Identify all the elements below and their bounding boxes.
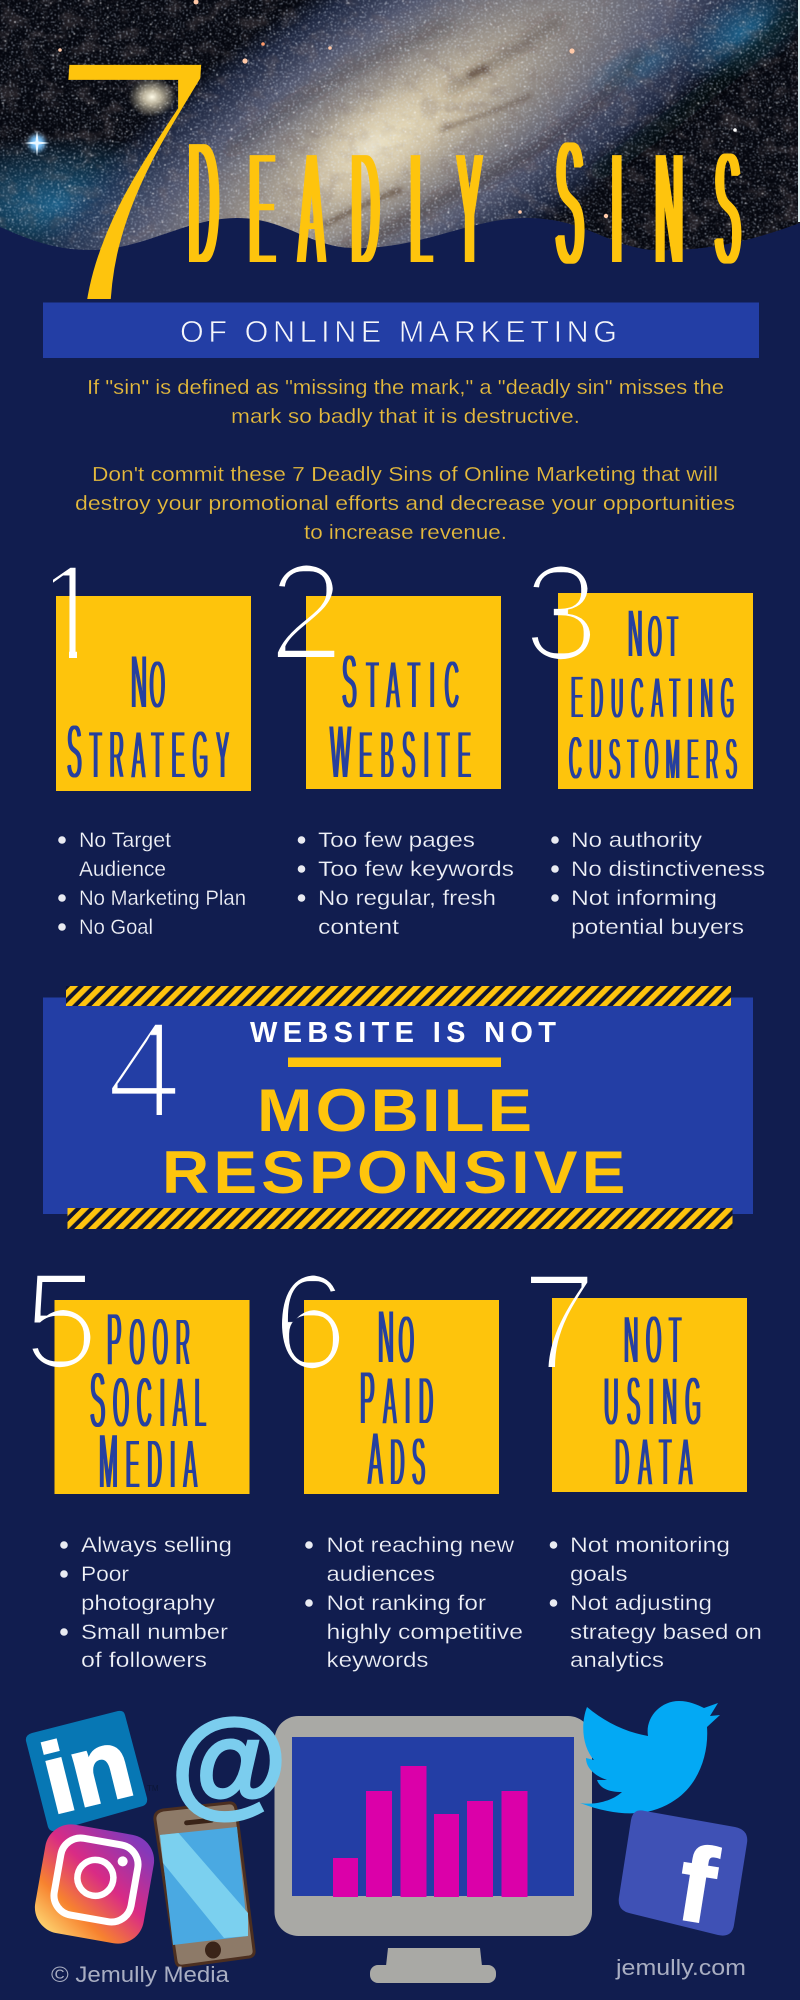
sin 3 bullets: No distinctiveness xyxy=(571,858,765,881)
icon: facebook xyxy=(619,1810,747,1946)
galaxy photo header xyxy=(0,0,800,250)
sin 6 panel: ADS xyxy=(368,1416,425,1501)
website: jemully.com xyxy=(615,1955,746,1980)
sin 5 bullets: of followers xyxy=(81,1649,207,1672)
sin 4 banner xyxy=(43,986,753,1229)
heading: mobile responsive xyxy=(162,1077,625,1206)
icon: instagram xyxy=(31,1820,158,1948)
sin 3 bullets: Not informing xyxy=(571,887,717,910)
sin 7 bullets: analytics xyxy=(570,1649,664,1672)
sin 6 bullets: Not reaching new xyxy=(326,1534,515,1557)
sin 5 panel xyxy=(23,1245,250,1506)
sin 1 bullets: No Goal xyxy=(79,916,153,939)
intro text: mark so badly that it is destructive. xyxy=(231,405,580,428)
number 3: 3 xyxy=(523,537,599,690)
sin 1 panel: NO xyxy=(131,639,165,724)
icon: phone xyxy=(155,1803,254,1966)
sin 2 panel xyxy=(268,536,501,794)
sin 5 bullets: photography xyxy=(81,1592,216,1615)
sin 7 bullets: Not monitoring xyxy=(570,1534,730,1557)
sin 3 panel: CUSTOMERS xyxy=(569,723,737,793)
number 5: 5 xyxy=(23,1245,99,1398)
intro text xyxy=(75,376,735,544)
sin 3 bullets xyxy=(551,829,765,939)
hazard strip top xyxy=(66,986,731,1006)
sin 3 panel: EDUCATING xyxy=(571,662,734,732)
sin 5 bullets: Always selling xyxy=(81,1534,232,1557)
icon: facebook: f xyxy=(670,1824,724,1946)
sin 7 panel: DATA xyxy=(615,1424,692,1500)
sin 6 bullets: audiences xyxy=(326,1563,435,1586)
intro text: destroy your promotional efforts and decrease your opportunities xyxy=(75,492,735,515)
sin 2 bullets: Too few pages xyxy=(318,829,475,852)
number 2: 2 xyxy=(268,536,344,689)
number 7: 7 xyxy=(521,1246,597,1399)
sin 7 bullets: strategy based on xyxy=(570,1621,762,1644)
sin 2 bullets: content xyxy=(318,916,399,939)
sin 3 bullets: potential buyers xyxy=(571,916,744,939)
sin 7 panel xyxy=(521,1246,747,1500)
sin 6 panel xyxy=(272,1246,499,1501)
sin 7 bullets xyxy=(550,1534,762,1672)
sin 7 bullets: Not adjusting xyxy=(570,1592,712,1615)
sin 3 bullets: No authority xyxy=(571,829,703,852)
title: deadly sins: DEADLY SINS xyxy=(189,102,740,304)
icon: monitor with bar chart xyxy=(274,1716,592,1983)
intro text: Don't commit these 7 Deadly Sins of Online Marketing that will xyxy=(92,463,718,486)
sin 1 bullets: Audience xyxy=(79,858,166,881)
heading: mobile responsive: RESPONSIVE xyxy=(162,1139,625,1206)
bar chart xyxy=(333,1766,528,1897)
icon: at sign: @ xyxy=(171,1695,287,1828)
sin 7 panel: USING xyxy=(604,1363,701,1440)
sin 2 bullets: Too few keywords xyxy=(318,858,514,881)
heading: mobile responsive: MOBILE xyxy=(257,1077,532,1144)
intro text: If "sin" is defined as "missing the mark," a "deadly sin" misses the xyxy=(87,376,724,399)
subtitle banner xyxy=(43,302,759,358)
sin 5 bullets: Small number xyxy=(81,1621,228,1644)
sin 5 panel: POOR xyxy=(107,1297,190,1381)
sin 7 bullets: goals xyxy=(570,1563,628,1586)
sin 6 panel: PAID xyxy=(360,1355,433,1440)
divider xyxy=(288,1058,501,1067)
sin 6 bullets: highly competitive xyxy=(326,1621,523,1644)
sin 1 bullets: No Marketing Plan xyxy=(79,887,246,910)
sin 6 bullets: keywords xyxy=(326,1649,428,1672)
number 4: 4 xyxy=(106,994,182,1147)
icon: linkedin: TM xyxy=(147,1784,159,1793)
hazard strip bottom xyxy=(68,1208,732,1229)
subtitle banner: OF ONLINE MARKETING xyxy=(180,315,617,349)
sin 1 bullets: No Target xyxy=(79,829,171,852)
sin 7 panel: NOT xyxy=(624,1302,681,1378)
sin 5 panel: MEDIA xyxy=(99,1419,197,1506)
sin 5 panel: SOCIAL xyxy=(90,1356,206,1445)
sin 5 bullets: Poor xyxy=(81,1563,129,1586)
sin 2 bullets: No regular, fresh xyxy=(318,887,496,910)
number 6: 6 xyxy=(272,1246,348,1399)
sin 6 panel: NO xyxy=(378,1294,414,1379)
credit: © Jemully Media xyxy=(51,1962,230,1987)
sin 1 panel: STRATEGY xyxy=(67,709,229,794)
title xyxy=(21,0,740,394)
sin 6 bullets: Not ranking for xyxy=(326,1592,486,1615)
sin 3 panel: NOT xyxy=(628,595,678,672)
sin 6 bullets xyxy=(305,1534,523,1672)
intro text: to increase revenue. xyxy=(304,521,507,544)
sin 2 panel: STATIC xyxy=(342,639,459,724)
sin 2 panel: WEBSITE xyxy=(330,709,471,794)
sin 1 panel xyxy=(53,568,251,791)
navy wave xyxy=(0,218,800,300)
sin 3 panel xyxy=(523,537,753,793)
sin 1 bullets xyxy=(58,829,246,939)
icon: twitter bird xyxy=(580,1701,720,1813)
heading: website is not: WEBSITE IS NOT xyxy=(250,1017,556,1049)
sin 2 bullets xyxy=(298,829,514,939)
sin 5 bullets xyxy=(60,1534,232,1672)
icon: linkedin: in xyxy=(31,1707,143,1834)
number 1: 1 xyxy=(32,537,108,690)
